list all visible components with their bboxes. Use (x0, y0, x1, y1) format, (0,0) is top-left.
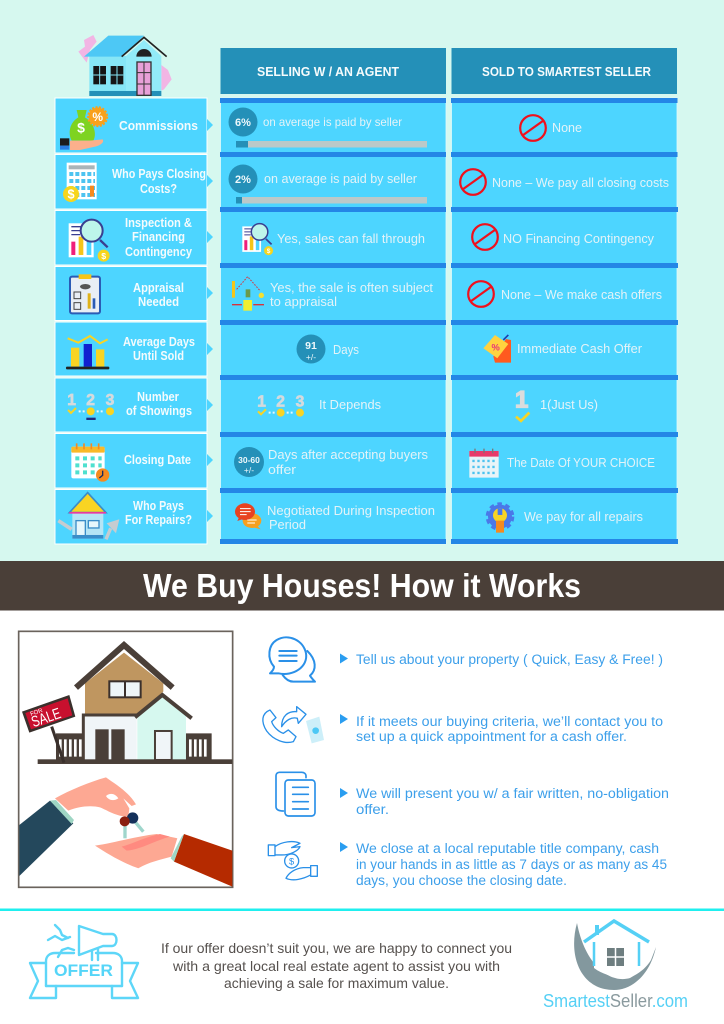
column header: selling with an agent: SELLING W / AN AGENT (257, 65, 399, 79)
cell: one showing: 1 (515, 386, 528, 413)
row label: inspection and financing contingency: $ (101, 251, 106, 261)
cell: we make cash offers: None – We make cash offers (501, 287, 662, 302)
step 4: close at title company: in your hands in as little as 7 days or as many as 45 (356, 857, 667, 872)
cell: closing costs 2 percent: 2% (235, 174, 251, 186)
row label: closing date (55, 434, 213, 488)
row label: who pays closing costs: Costs? (140, 182, 177, 196)
cell: date of your choice: The Date Of YOUR CHOICE (507, 455, 655, 470)
cell: negotiated during inspection (235, 503, 435, 532)
text: closing note: with a great local real estate agent to assist you with (172, 958, 500, 974)
cell: sales can fall through (242, 224, 425, 255)
cell: commissions 6 percent (228, 108, 427, 148)
panel: steps (263, 637, 669, 888)
row label: number of showings: 3 (106, 392, 115, 409)
row label: number of showings: 2 (86, 392, 95, 409)
logo: SmartestSeller.com: SmartestSeller.com (543, 991, 688, 1011)
cell: we pay all closing costs: None – We pay all closing costs (492, 175, 669, 190)
row label: inspection and financing contingency (55, 210, 213, 265)
step 2: contact for cash offer: set up a quick appointment for a cash offer. (356, 729, 627, 744)
illustration: house for sale and keys handover (19, 631, 233, 887)
cell: 30-60 days (234, 447, 428, 477)
column header: selling with an agent (220, 48, 446, 94)
cell: no financing contingency (472, 224, 654, 250)
cell: 91 days: +/- (306, 352, 316, 362)
row label: average days until sold: Average Days (123, 335, 195, 349)
row label: inspection and financing contingency: Contingency (125, 245, 192, 259)
step 1: tell us about your property: Tell us about your property ( Quick, Easy & Free! ) (356, 652, 663, 667)
text: closing note: achieving a sale for maximum value. (224, 975, 449, 991)
cell: we pay all closing costs (460, 169, 669, 195)
panel: selling with an agent (220, 98, 446, 544)
step 4: close at title company: days, you choose the closing date. (356, 873, 567, 888)
step 4: close at title company (268, 841, 667, 888)
row label: number of showings: 1 (67, 392, 76, 409)
cell: immediate cash offer: Immediate Cash Offer (517, 341, 643, 356)
step 4: close at title company: We close at a local reputable title company, cash (356, 841, 659, 856)
text: closing note: If our offer doesn’t suit you, we are happy to connect you (161, 940, 512, 956)
cell: we pay for all repairs: We pay for all repairs (524, 509, 643, 524)
row label: who pays closing costs: $ (67, 188, 75, 202)
row label: inspection and financing contingency: Financing (132, 230, 185, 244)
panel: row labels (55, 98, 213, 544)
row label: number of showings: Number (137, 390, 179, 404)
cell: negotiated during inspection: Negotiated During Inspection (267, 503, 435, 518)
logo: SmartestSeller.com (543, 921, 688, 1011)
row label: who pays for repairs (55, 490, 213, 544)
step 3: written offer: We will present you w/ a fair written, no-obligation (356, 786, 669, 801)
row label: who pays closing costs: Who Pays Closing (112, 167, 206, 181)
cell: sales can fall through: $ (267, 248, 271, 255)
cell: it depends: It Depends (319, 397, 381, 412)
step 4: close at title company: $ (289, 856, 295, 866)
row label: who pays closing costs (55, 154, 213, 209)
cell: none (520, 115, 582, 141)
column header: sold to smartest seller (452, 48, 677, 94)
cell: closing costs 2 percent: on average is paid by seller (264, 171, 418, 186)
row label: who pays for repairs: Who Pays (133, 499, 184, 513)
row label: inspection and financing contingency: Inspection & (125, 216, 192, 230)
row label: number of showings: of Showings (126, 404, 192, 418)
cell: no financing contingency: NO Financing Contingency (503, 231, 654, 246)
icon: offer megaphone (30, 925, 138, 998)
cell: closing costs 2 percent (228, 164, 427, 204)
cell: one showing (515, 386, 598, 421)
row label: appraisal needed: Appraisal (133, 281, 184, 295)
illustration: house for sale and keys handover: SALE (29, 705, 63, 731)
column header: sold to smartest seller: SOLD TO SMARTEST SELLER (482, 65, 651, 79)
cell: subject to appraisal (232, 277, 433, 311)
cell: it depends: 3 (296, 393, 305, 410)
row label: commissions (55, 98, 213, 153)
step 3: written offer: offer. (356, 802, 389, 817)
row label: average days until sold: Until Sold (133, 349, 184, 363)
cell: 30-60 days: 30-60 (238, 455, 260, 465)
cell: 91 days: Days (333, 342, 359, 357)
cell: it depends: 2 (276, 393, 285, 410)
cell: subject to appraisal: Yes, the sale is often subject (270, 280, 433, 295)
cell: we pay for all repairs (488, 505, 643, 533)
row label: commissions: $ (77, 120, 85, 136)
row label: appraisal needed (55, 266, 213, 320)
cell: commissions 6 percent: 6% (235, 117, 251, 129)
cell: 91 days: 91 (305, 340, 317, 352)
step 3: written offer (276, 772, 669, 817)
cell: 30-60 days: +/- (244, 465, 254, 475)
cell: commissions 6 percent: on average is paid by seller (263, 115, 402, 129)
cell: it depends: 1 (257, 393, 266, 410)
cell: 91 days (296, 334, 359, 364)
icon: top house (78, 35, 172, 96)
cell: we make cash offers (468, 281, 662, 307)
cell: immediate cash offer (483, 335, 643, 363)
cell: subject to appraisal: to appraisal (270, 294, 337, 309)
row label: commissions: % (92, 110, 103, 124)
cell: sales can fall through: Yes, sales can fall through (277, 231, 425, 246)
text: closing note (161, 940, 512, 991)
cell: immediate cash offer: % (492, 343, 501, 353)
cell: date of your choice (469, 449, 655, 478)
step 1: tell us about your property (269, 637, 663, 682)
row label: commissions: Commissions (119, 119, 198, 133)
row label: closing date: Closing Date (124, 453, 191, 467)
row label: average days until sold (55, 322, 213, 376)
cell: none: None (552, 120, 582, 135)
row label: who pays for repairs: For Repairs? (125, 513, 192, 527)
cell: 30-60 days: Days after accepting buyers (268, 447, 428, 462)
row label: number of showings (55, 378, 213, 432)
banner: how it works: We Buy Houses! How it Works (143, 567, 581, 604)
panel: sold to smartest seller (451, 98, 678, 544)
step 2: contact for cash offer (263, 707, 663, 744)
cell: 30-60 days: offer (268, 462, 297, 477)
icon: offer megaphone: OFFER (54, 961, 113, 980)
cell: negotiated during inspection: Period (269, 517, 306, 532)
cell: one showing: 1(Just Us) (540, 397, 598, 412)
illustration: house for sale and keys handover: FOR (30, 708, 44, 718)
row label: appraisal needed: Needed (138, 295, 179, 309)
step 2: contact for cash offer: If it meets our buying criteria, we’ll contact you to (356, 714, 663, 729)
cell: it depends (257, 393, 381, 417)
banner: how it works (0, 561, 724, 610)
